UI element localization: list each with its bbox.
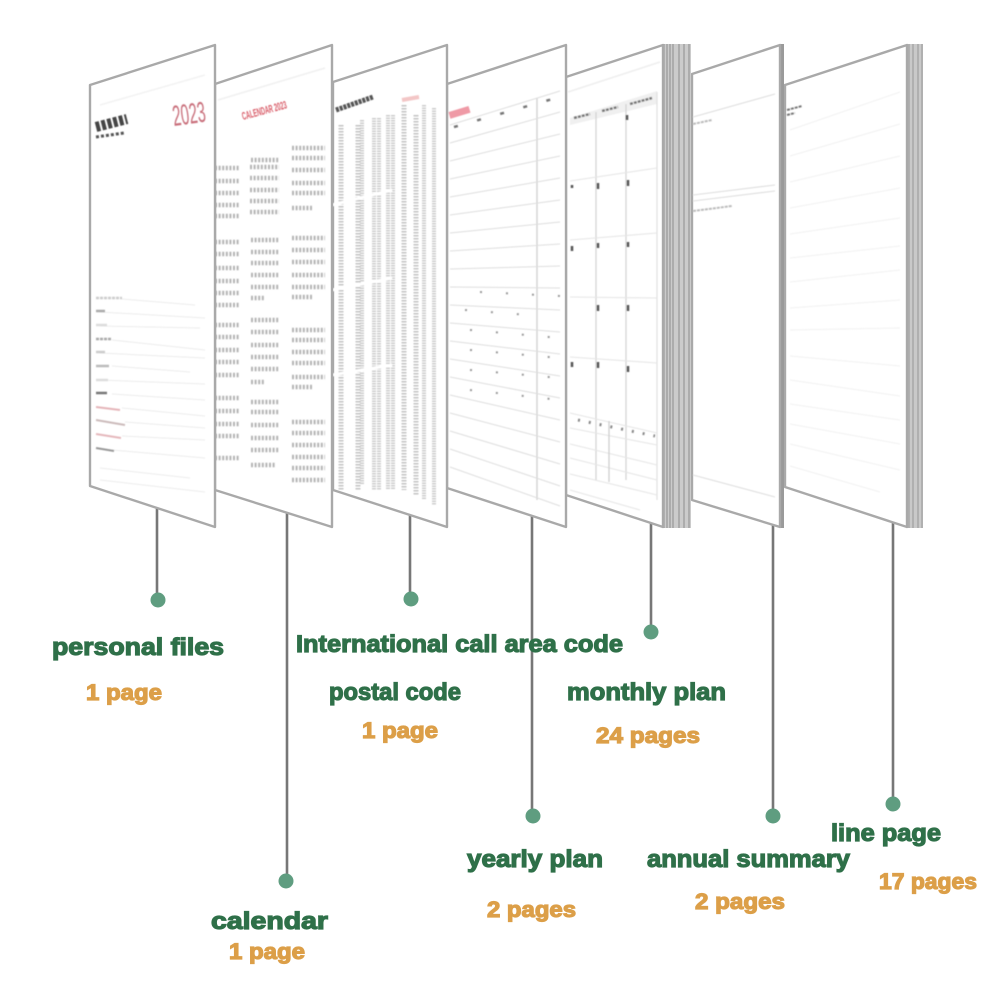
page: annual summary bbox=[692, 44, 784, 528]
label: personal files, 1 page: 1 page bbox=[86, 680, 162, 705]
label: annual summary, 2 pages: 2 pages bbox=[695, 889, 785, 914]
page: line page bbox=[785, 44, 923, 528]
label: monthly plan, 24 pages: 24 pages bbox=[596, 723, 700, 748]
connector: annual summary bbox=[766, 520, 780, 824]
label: line page, 17 pages: line page bbox=[831, 820, 941, 847]
connector: monthly plan bbox=[644, 520, 658, 640]
connector: line page bbox=[886, 520, 900, 812]
connector: personal files bbox=[150, 505, 166, 608]
owner heading bbox=[96, 119, 127, 127]
label: International call area code, postal code, 1 page: 1 page bbox=[362, 718, 438, 743]
connector: yearly plan bbox=[526, 515, 540, 824]
label: yearly plan, 2 pages: 2 pages bbox=[487, 897, 576, 922]
year 2023: 2023 bbox=[171, 97, 208, 133]
page: calendar bbox=[215, 45, 332, 527]
label: annual summary, 2 pages bbox=[647, 846, 851, 914]
label: calendar, 1 page: 1 page bbox=[229, 939, 305, 964]
label: line page, 17 pages: 17 pages bbox=[879, 869, 977, 894]
label: yearly plan, 2 pages: yearly plan bbox=[467, 846, 603, 873]
label: monthly plan, 24 pages: monthly plan bbox=[567, 679, 726, 706]
label: yearly plan, 2 pages bbox=[467, 846, 603, 922]
label: personal files, 1 page: personal files bbox=[52, 634, 224, 661]
label: calendar, 1 page bbox=[211, 908, 328, 964]
label: annual summary, 2 pages: annual summary bbox=[647, 846, 851, 873]
page: monthly plan bbox=[566, 44, 691, 528]
page edge stack bbox=[662, 44, 691, 528]
page edge bbox=[779, 44, 784, 528]
page: yearly plan bbox=[447, 45, 566, 527]
connector: calendar bbox=[278, 510, 294, 888]
label: International call area code, postal code, 1 page bbox=[296, 631, 623, 743]
label: monthly plan, 24 pages bbox=[567, 679, 726, 748]
page edge stack bbox=[906, 44, 923, 528]
form labels bbox=[96, 297, 122, 299]
page: personal files bbox=[90, 45, 215, 527]
red heading bbox=[448, 106, 471, 119]
label: International call area code, postal code, 1 page: International call area code bbox=[296, 631, 623, 658]
red heading: CALENDAR 2023 bbox=[241, 99, 288, 123]
label: calendar, 1 page: calendar bbox=[211, 908, 328, 935]
label: International call area code, postal code, 1 page: postal code bbox=[329, 679, 461, 706]
month rows bbox=[215, 148, 325, 216]
page: international call area code and postal code bbox=[332, 45, 447, 527]
black heading bbox=[336, 97, 373, 110]
label: personal files, 1 page bbox=[52, 634, 224, 705]
label: line page, 17 pages bbox=[831, 820, 977, 894]
form lines bbox=[100, 299, 205, 492]
connector: international call area code bbox=[404, 512, 418, 606]
